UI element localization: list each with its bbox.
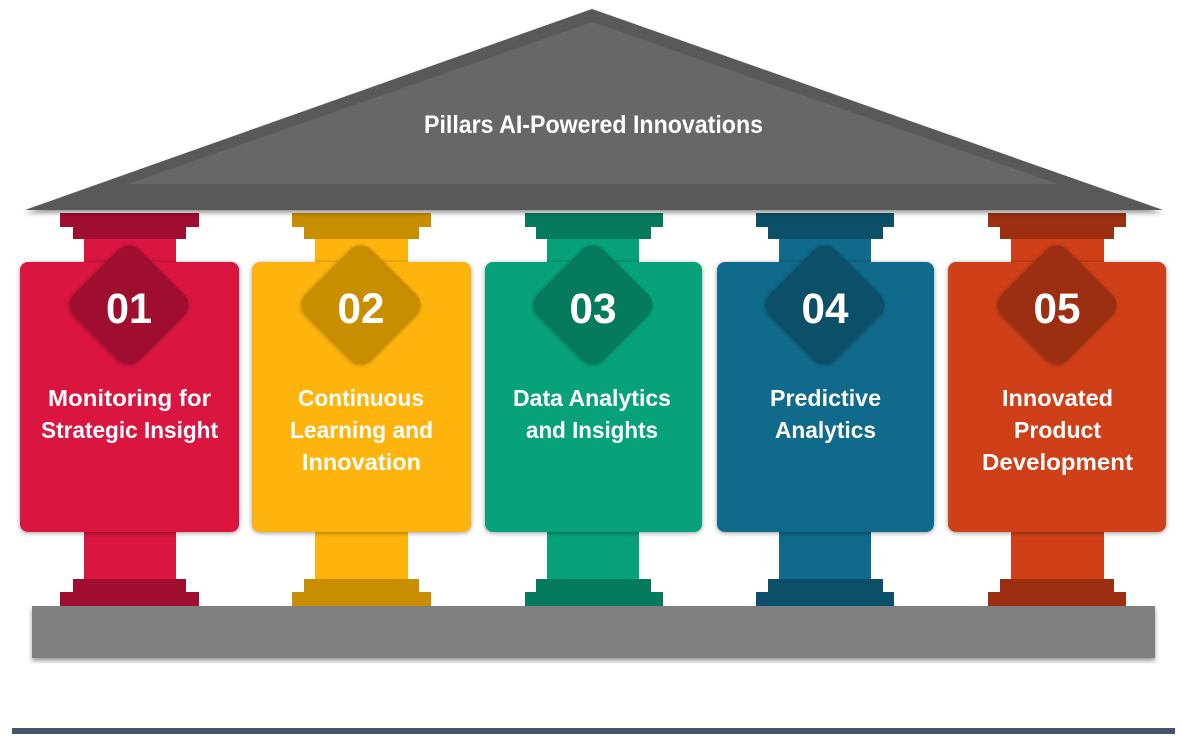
- pillar 4 label: Predictive: [770, 385, 881, 411]
- pillar 2 label: [290, 385, 433, 475]
- pillar 4 label: [770, 385, 881, 443]
- bottom bar: [12, 728, 1175, 734]
- pillar 1 number badge: 01: [106, 285, 152, 333]
- pillar 4: [717, 213, 934, 606]
- pillar 5: [948, 213, 1166, 606]
- pillar 3 number badge: [527, 239, 659, 371]
- pillar 2 column: [292, 213, 431, 606]
- pillar 3 label: and Insights: [526, 417, 658, 443]
- pillar 5 column: [988, 213, 1126, 606]
- pillar 3 column: [525, 213, 663, 606]
- roof inner triangle: [128, 22, 1058, 184]
- title: Pillars AI-Powered Innovations: [424, 111, 763, 139]
- pillar 4 number badge: 04: [802, 285, 849, 333]
- pillar 1 column: [60, 213, 199, 606]
- roof outer triangle: [25, 9, 1163, 210]
- pillar 5 label: Development: [982, 449, 1133, 475]
- pillar 1 label: [41, 385, 218, 443]
- pillar 2 card: [252, 262, 471, 532]
- pillar 2 number badge: [295, 239, 427, 371]
- pillar 1 card: [20, 262, 239, 532]
- pillar 3 label: Data Analytics: [513, 385, 671, 411]
- pillar 1 label: Monitoring for: [48, 385, 211, 411]
- pillar 3 label: [513, 385, 671, 443]
- pillar 3: [485, 213, 702, 606]
- roof: [25, 9, 1163, 210]
- pillar 5 label: Innovated: [1002, 385, 1113, 411]
- pillar 5 card: [948, 262, 1166, 532]
- platform base: [32, 606, 1155, 658]
- pillar 4 card: [717, 262, 934, 532]
- pillar 4 column: [756, 213, 894, 606]
- pillar 2 label: Innovation: [302, 449, 421, 475]
- pillar 5 number badge: [991, 239, 1123, 371]
- pillar 1 number badge: [63, 239, 195, 371]
- pillar 1: [20, 213, 239, 606]
- pillar 2 number badge: 02: [338, 285, 384, 333]
- pillar 5 number badge: 05: [1034, 285, 1080, 333]
- pillar 4 number badge: [759, 239, 891, 371]
- pillar 3 card: [485, 262, 702, 532]
- pillar 1 label: Strategic Insight: [41, 417, 218, 443]
- pillar 3 number badge: 03: [570, 285, 616, 333]
- pillar 2 label: Continuous: [298, 385, 424, 411]
- pillar 4 label: Analytics: [775, 417, 876, 443]
- pillar 2: [252, 213, 471, 606]
- pillar 5 label: Product: [1014, 417, 1101, 443]
- pillar 2 label: Learning and: [290, 417, 433, 443]
- pillar 5 label: [982, 385, 1133, 475]
